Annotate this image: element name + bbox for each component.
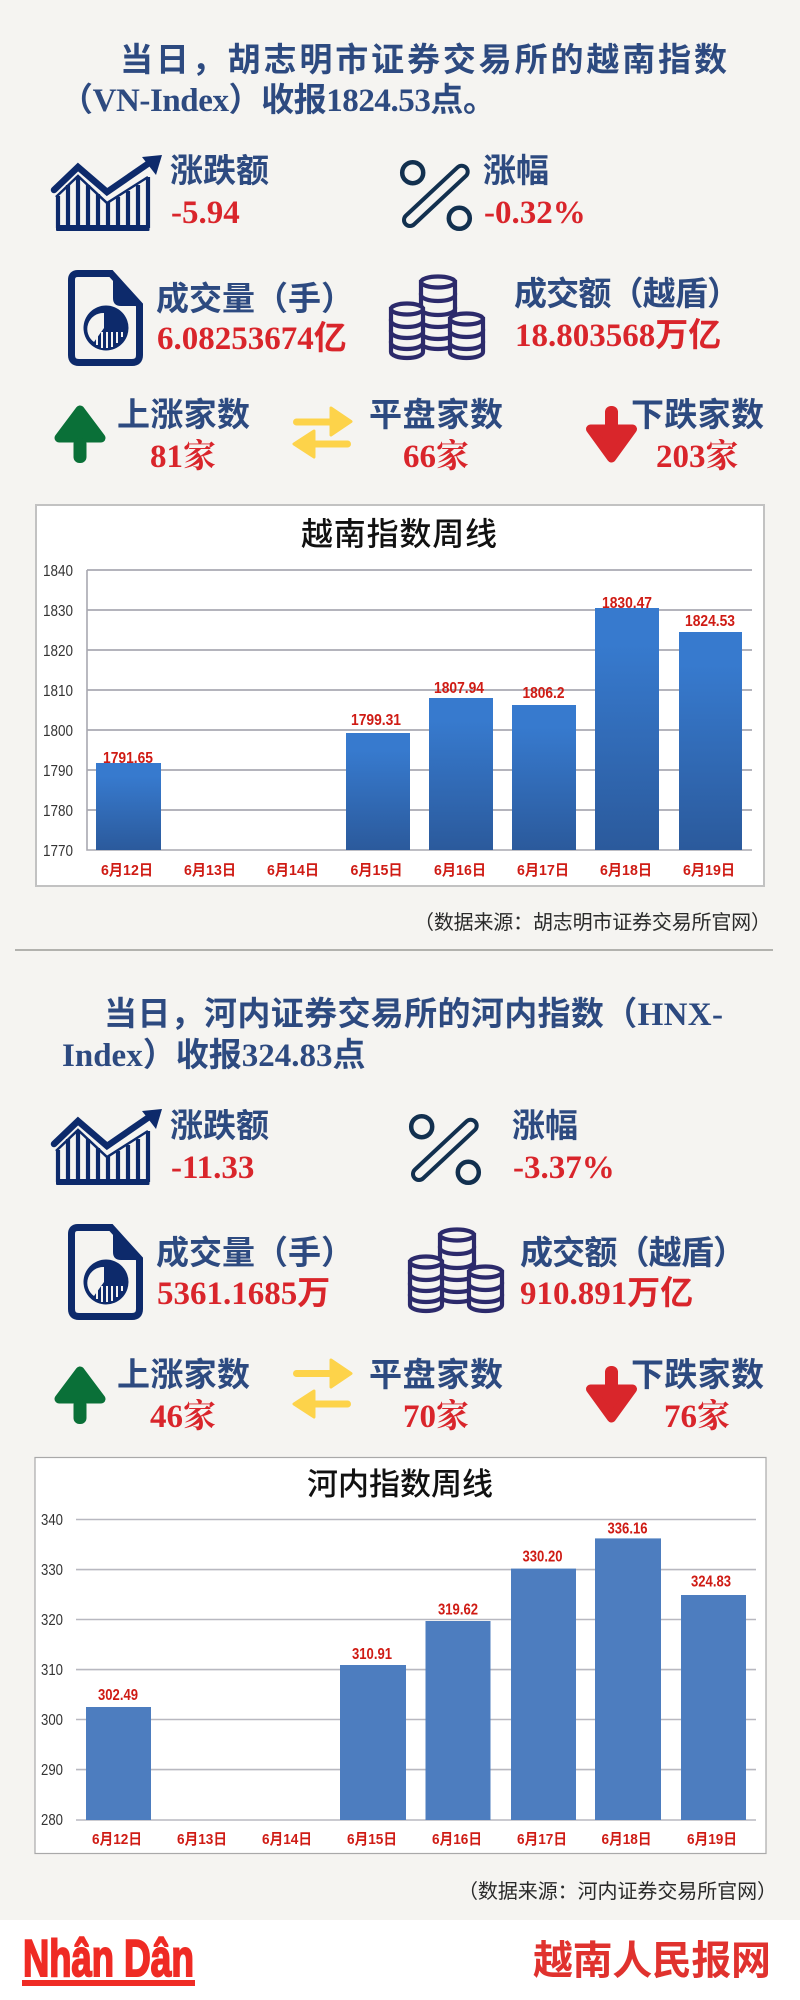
icon: up arrow [59,1371,101,1424]
x axis labels: 6月18日 [600,862,652,879]
source note: （数据来源：胡志明市证券交易所官网） [414,911,771,934]
x axis labels: 6月19日 [687,1831,737,1848]
y axis labels: 300 [41,1712,63,1729]
bar value labels: 319.62 [438,1602,478,1618]
stat: turnover: 910.891万亿 [520,1266,693,1314]
stat: advancers [117,1356,250,1435]
icon: coin stacks [410,1230,502,1311]
bar value labels: 302.49 [98,1687,138,1704]
icon: percent [411,1116,479,1183]
stat: change amount: 涨跌额 [170,152,269,189]
bar value labels: 1799.31 [351,712,401,729]
stat: unchanged: 70家 [403,1398,469,1435]
x axis labels: 6月17日 [517,1831,567,1848]
stat: volume: 成交量（手） [156,1234,354,1271]
bar value labels: 336.16 [608,1520,648,1538]
stat: unchanged [369,396,503,475]
stat: unchanged: 平盘家数 [369,1356,503,1393]
icon: up arrow [59,410,101,463]
bars [86,1538,746,1820]
y axis labels: 1810 [43,683,73,700]
bar value labels: 1806.2 [522,685,565,702]
stat: turnover [514,275,740,356]
stat: turnover: 成交额（越盾） [514,275,740,312]
heading: HNX-Index: Index）收报324.83点 [62,1037,365,1074]
section: HNX-Index [35,996,777,1903]
x axis labels: 6月13日 [177,1831,227,1848]
stat: decliners: 下跌家数 [631,1356,764,1393]
chart title: 越南指数周线 [301,516,497,552]
stat: decliners: 下跌家数 [631,396,764,433]
icon: coin stacks [391,276,483,358]
x axis labels [92,1831,737,1848]
stat: volume [156,280,354,359]
bar value labels: 324.83 [691,1574,731,1590]
logo: Nhan Dan: Nhân [23,1930,114,1988]
stat: change percent: -0.32% [484,195,586,231]
stat: change amount: 涨跌额 [170,1107,269,1144]
x axis labels: 6月18日 [602,1831,652,1848]
stat: advancers: 46家 [150,1398,216,1435]
stat: advancers: 81家 [150,438,216,475]
heading: HNX-Index [62,996,723,1074]
source note: （数据来源：河内证券交易所官网） [458,1880,777,1903]
stat: turnover: 成交额（越盾） [520,1234,746,1271]
icon: down arrow [590,1366,632,1418]
panel: VN-Index weekly chart [36,505,764,886]
x axis labels: 6月14日 [262,1831,312,1848]
heading: VN-Index: （VN-Index）收报1824.53点。 [60,82,496,119]
stat: turnover: 18.803568万亿 [515,308,721,356]
x axis labels [101,862,735,879]
bar value labels [103,595,735,767]
stat: advancers [117,396,250,475]
logo: Nhan Dan: Dân [124,1930,194,1988]
section: VN-Index [36,42,771,934]
icon: rising chart [54,155,162,231]
stat: change percent: -3.37% [513,1150,615,1186]
stat: unchanged [369,1356,503,1435]
stat: change amount [170,1107,269,1186]
x axis labels: 6月16日 [432,1831,482,1848]
icon: flat arrows [293,1360,351,1417]
icon: down arrow [590,406,632,458]
y axis labels: 330 [41,1562,63,1579]
icon: rising chart [54,1109,162,1185]
stat: change percent [512,1107,615,1186]
bar value labels: 1824.53 [685,613,735,630]
y axis labels: 1800 [43,723,73,740]
panel: HNX-Index weekly chart [35,1458,766,1854]
stat: advancers: 上涨家数 [117,396,250,433]
icon: document with pie chart [72,273,142,362]
heading: VN-Index: 当日，胡志明市证券交易所的越南指数 [120,42,727,79]
x axis labels: 6月13日 [184,862,236,879]
y axis labels: 1830 [43,603,73,620]
y axis labels: 340 [41,1512,63,1529]
y axis labels: 280 [41,1812,63,1829]
icon: flat arrows [293,408,351,457]
heading: VN-Index [60,42,727,119]
y axis labels [41,1512,63,1829]
stat: unchanged: 66家 [403,438,469,475]
x axis labels: 6月17日 [517,862,569,879]
y axis labels: 1770 [43,843,73,860]
stat: volume: 6.08253674亿 [157,311,347,359]
bar value labels: 1807.94 [434,680,484,697]
stat: change percent [483,152,586,231]
stat: advancers: 上涨家数 [117,1356,250,1393]
stat: decliners: 203家 [656,438,738,475]
chart title: 河内指数周线 [307,1467,493,1502]
publisher name: 越南人民报网 [533,1939,771,1983]
y axis labels: 1820 [43,643,73,660]
y axis labels: 1780 [43,803,73,820]
stat: decliners [631,396,764,475]
x axis labels: 6月12日 [92,1831,142,1848]
icon: percent [402,162,470,229]
x axis labels: 6月15日 [347,1831,397,1848]
bars [96,608,742,850]
stat: volume: 成交量（手） [156,280,354,317]
stat: change amount [170,152,269,231]
x axis labels: 6月15日 [350,862,402,879]
y axis labels: 320 [41,1612,63,1629]
stat: change amount: -5.94 [171,195,240,231]
bar value labels: 310.91 [352,1646,392,1663]
bar value labels: 1830.47 [602,595,652,612]
stat: change percent: 涨幅 [512,1107,578,1144]
bar value labels: 330.20 [522,1548,563,1566]
stat: volume [156,1234,354,1314]
icon: document with pie chart [72,1227,142,1316]
heading: HNX-Index: 当日，河内证券交易所的河内指数（HNX- [104,996,723,1033]
x axis labels: 6月14日 [267,862,319,879]
stat: turnover [520,1234,746,1314]
y axis labels [43,563,73,860]
x axis labels: 6月12日 [101,862,153,879]
y axis labels: 290 [41,1762,63,1779]
bar value labels: 1791.65 [103,750,153,767]
bar value labels [98,1520,731,1704]
stat: unchanged: 平盘家数 [369,396,503,433]
y axis labels: 1790 [43,763,73,780]
stat: change percent: 涨幅 [483,152,549,189]
x axis labels: 6月16日 [434,862,486,879]
stat: change amount: -11.33 [171,1150,254,1186]
y axis labels: 1840 [43,563,73,580]
stat: volume: 5361.1685万 [157,1266,330,1314]
footer band [0,1920,800,2000]
x axis labels: 6月19日 [683,862,735,879]
stat: decliners [631,1356,764,1435]
y axis labels: 310 [41,1662,63,1679]
stat: decliners: 76家 [664,1398,730,1435]
